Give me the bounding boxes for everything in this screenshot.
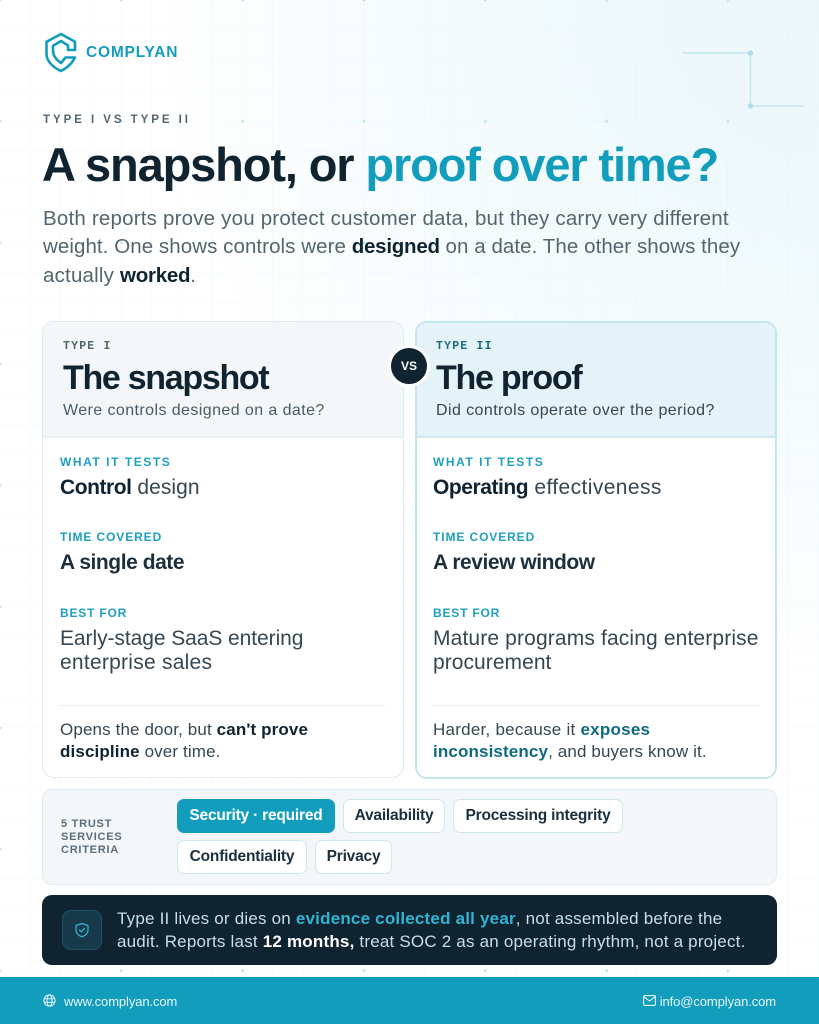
- email: info@complyan.com: [660, 994, 776, 1009]
- Type II best for: BEST FOR: [433, 606, 500, 620]
- Type I heading: The snapshot: [63, 359, 268, 397]
- callout text: [117, 909, 746, 951]
- Type I verdict: Opens the door, but can't prove: [60, 720, 308, 739]
- Type II best for: [433, 606, 759, 674]
- icon: shield check: [62, 910, 102, 950]
- Type II what it tests: WHAT IT TESTS: [433, 455, 544, 469]
- Type II verdict: [433, 720, 707, 761]
- pill: privacy: Privacy: [327, 848, 380, 865]
- Type I best for: enterprise sales: [60, 651, 212, 674]
- callout: [42, 895, 777, 965]
- Type I verdict: discipline over time.: [60, 742, 221, 761]
- Type I time covered: [60, 530, 184, 574]
- logo: [45, 32, 178, 72]
- pill: privacy: [315, 840, 392, 874]
- pill: processing integrity: Processing integrity: [465, 807, 610, 824]
- Type I header: [43, 322, 403, 438]
- Type I what it tests: Control design: [60, 476, 200, 499]
- Type II question: Did controls operate over the period?: [436, 402, 715, 419]
- panel: Type I: [42, 321, 404, 778]
- callout text: Type II lives or dies on evidence collected all year, not assembled before the: [117, 909, 722, 928]
- website: www.complyan.com: [64, 994, 177, 1009]
- criteria pills: [177, 799, 623, 874]
- title: A snapshot, or proof over time?: [42, 138, 718, 191]
- pill: confidentiality: [177, 840, 307, 874]
- Type II heading: The proof: [436, 359, 582, 397]
- VS badge: VS: [401, 359, 417, 373]
- pill: availability: [343, 799, 445, 833]
- Type II verdict: Harder, because it exposes: [433, 720, 650, 739]
- pill: availability: Availability: [355, 807, 433, 824]
- Type I what it tests: [60, 455, 200, 499]
- Type II header: [417, 323, 775, 438]
- pill: security: [177, 799, 335, 833]
- panel: Type II: [415, 321, 777, 779]
- Type I best for: [60, 606, 303, 674]
- Type II tag: TYPE II: [436, 340, 493, 353]
- Type I best for: BEST FOR: [60, 606, 127, 620]
- VS badge: [388, 345, 430, 387]
- intro paragraph: actually worked.: [43, 264, 196, 287]
- Type I tag: TYPE I: [63, 340, 112, 353]
- Type II time covered: TIME COVERED: [433, 530, 535, 544]
- Type II time covered: A review window: [433, 551, 595, 574]
- Type I best for: Early-stage SaaS entering: [60, 627, 303, 650]
- eyebrow: TYPE I VS TYPE II: [43, 114, 191, 126]
- Type II what it tests: Operating effectiveness: [433, 476, 662, 499]
- panel: trust services criteria: [42, 789, 777, 885]
- Type I time covered: TIME COVERED: [60, 530, 162, 544]
- Type II time covered: [433, 530, 596, 574]
- brand name: COMPLYAN: [86, 44, 178, 61]
- pill: confidentiality: Confidentiality: [190, 848, 294, 865]
- criteria label: 5 TRUST: [61, 818, 112, 830]
- intro paragraph: Both reports prove you protect customer data, but they carry very different: [43, 207, 729, 230]
- intro paragraph: [43, 207, 740, 287]
- icon: globe: [43, 994, 56, 1007]
- Type II best for: Mature programs facing enterprise: [433, 627, 759, 650]
- Type II best for: procurement: [433, 651, 551, 674]
- intro paragraph: weight. One shows controls were designed on a date. The other shows they: [43, 235, 740, 258]
- Type I what it tests: WHAT IT TESTS: [60, 455, 171, 469]
- criteria label: [61, 818, 122, 856]
- Type I verdict: [60, 720, 308, 761]
- criteria label: CRITERIA: [61, 844, 119, 856]
- Type I question: Were controls designed on a date?: [63, 402, 325, 419]
- footer: [0, 977, 819, 1024]
- Type II verdict: inconsistency, and buyers know it.: [433, 742, 707, 761]
- icon: shield: [45, 32, 76, 72]
- criteria label: SERVICES: [61, 831, 122, 843]
- callout text: audit. Reports last 12 months, treat SOC 2 as an operating rhythm, not a project.: [117, 932, 746, 951]
- icon: envelope: [643, 995, 656, 1006]
- pill: processing integrity: [453, 799, 623, 833]
- Type I time covered: A single date: [60, 551, 184, 574]
- pill: security: Security · required: [189, 807, 323, 824]
- Type II what it tests: [433, 455, 662, 499]
